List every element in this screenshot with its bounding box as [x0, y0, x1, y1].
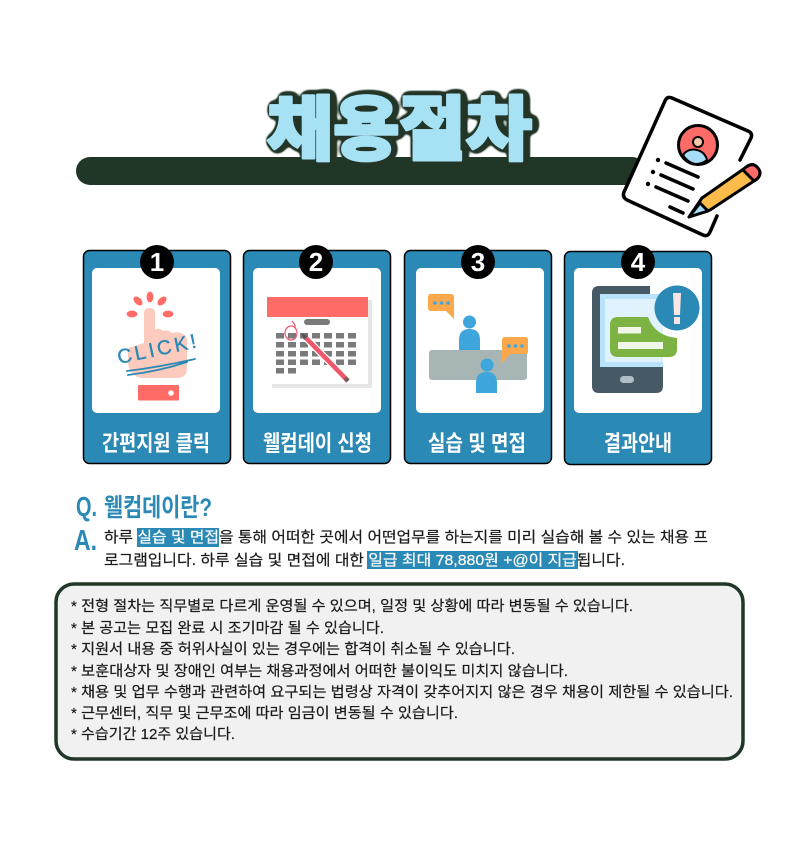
- answer label: A.: [74, 525, 97, 557]
- note 6: * 근무센터, 직무 및 근무조에 따라 임금이 변동될 수 있습니다.: [71, 705, 458, 722]
- number badge 1: 1: [150, 247, 164, 277]
- panel: step 2: [244, 245, 390, 464]
- card inner panel: [253, 268, 381, 413]
- number badge 1: [140, 245, 174, 279]
- number badge 3: [461, 245, 495, 279]
- icon: click hand: CLICK!: [115, 331, 198, 369]
- note 5: * 채용 및 업무 수행과 관련하여 요구되는 법령상 자격이 갖추어지지 않은 경우 채용이 제한될 수 있습니다.: [71, 684, 733, 701]
- note 7: * 수습기간 12주 있습니다.: [71, 726, 235, 743]
- number badge 3: 3: [471, 247, 485, 277]
- notes box: [56, 584, 743, 759]
- icon: interview: [428, 294, 528, 393]
- panel: step 1: [84, 245, 230, 464]
- icon: document and pencil: [623, 97, 760, 236]
- caption 2: 웰컴데이 신청: [263, 431, 372, 456]
- caption 3: 실습 및 면접: [428, 431, 526, 456]
- panel: step 4: [564, 245, 712, 464]
- note 4: * 보훈대상자 및 장애인 여부는 채용과정에서 어떠한 불이익도 미치지 않습니다.: [71, 663, 568, 680]
- icon: click hand: [115, 292, 198, 400]
- note 3: * 지원서 내용 중 허위사실이 있는 경우에는 합격이 취소될 수 있습니다.: [71, 641, 515, 658]
- number badge 2: 2: [309, 247, 323, 277]
- number badge 4: [621, 245, 655, 279]
- card inner panel: [92, 268, 220, 413]
- note 1: * 전형 절차는 직무별로 다르게 운영될 수 있으며, 일정 및 상황에 따라 변동될 수 있습니다.: [71, 598, 633, 615]
- note 2: * 본 공고는 모집 완료 시 조기마감 될 수 있습니다.: [71, 620, 384, 637]
- panel: step 3: [404, 245, 552, 464]
- caption 4: 결과안내: [604, 431, 672, 456]
- card background: [244, 250, 390, 464]
- highlight: first phrase: [137, 528, 219, 547]
- panel: notes: [56, 584, 743, 759]
- highlight: second phrase: [367, 551, 578, 569]
- number badge 4: 4: [631, 247, 646, 277]
- answer line 2: 로그램입니다. 하루 실습 및 면접에 대한 일급 최대 78,880원 +@이 지급 됩니다.: [104, 552, 625, 569]
- card background: [84, 250, 230, 464]
- card inner panel: [416, 268, 544, 413]
- question heading: Q.: [76, 491, 97, 522]
- title: 채용절차: [267, 91, 532, 169]
- card background: [404, 250, 552, 464]
- title bar: [76, 157, 646, 185]
- card background: [564, 252, 712, 464]
- card inner panel: [574, 268, 702, 413]
- number badge 2: [299, 245, 333, 279]
- icon: phone notification: [592, 286, 700, 393]
- icon: calendar: [267, 297, 372, 388]
- caption 1: 간편지원 클릭: [102, 431, 210, 456]
- question heading: 웰컴데이란?: [104, 494, 212, 522]
- answer line 1: 하루 실습 및 면접 을 통해 어떠한 곳에서 어떤업무를 하는지를 미리 실습해 볼 수 있는 채용 프: [104, 529, 708, 546]
- question heading: [76, 491, 212, 522]
